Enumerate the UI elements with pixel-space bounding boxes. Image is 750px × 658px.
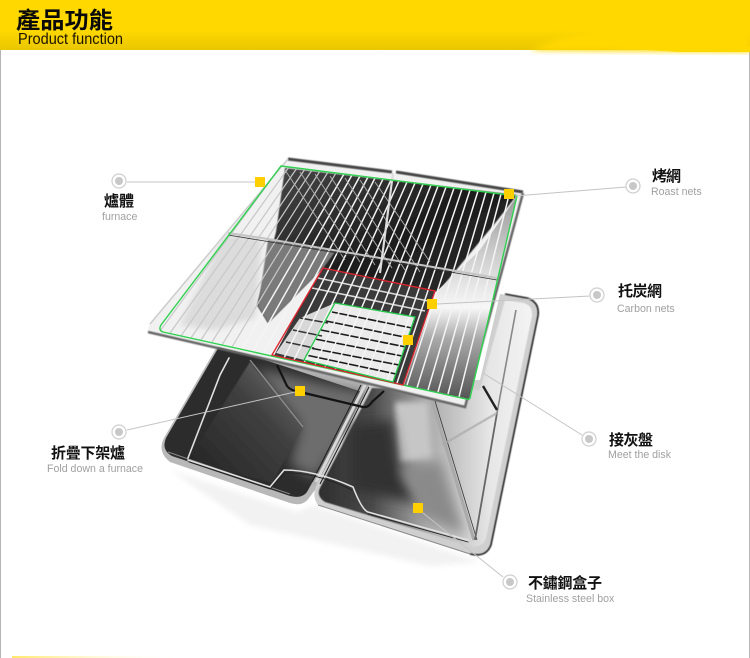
right tray bbox=[314, 294, 538, 555]
folding legs bbox=[250, 310, 516, 540]
callout: roast nets: 烤網 bbox=[652, 167, 681, 185]
marker: inner net bbox=[403, 335, 413, 345]
callout: ash tray: 接灰盤 bbox=[609, 431, 653, 449]
callout: furnace: furnace bbox=[102, 211, 137, 223]
callout: ash tray bbox=[582, 431, 672, 461]
title: 產品功能 bbox=[16, 7, 113, 33]
left tray bbox=[162, 345, 372, 504]
bottom yellow streak bbox=[12, 656, 182, 658]
tray inner wire bbox=[188, 358, 468, 542]
callout: carbon nets: Carbon nets bbox=[617, 303, 675, 315]
callout: ash tray: Meet the disk bbox=[608, 449, 672, 461]
grill wires bbox=[242, 174, 509, 397]
callout: stainless steel box: Stainless steel box bbox=[526, 593, 615, 605]
grill centre bar bbox=[380, 173, 393, 273]
callout: furnace: 爐體 bbox=[104, 192, 134, 210]
basket floor bbox=[272, 268, 435, 385]
grill cross bar bbox=[228, 233, 497, 278]
callout: roast nets bbox=[626, 167, 702, 198]
tray joint bbox=[316, 385, 365, 482]
callout: fold down furnace bbox=[47, 425, 143, 475]
marker: fold down bbox=[295, 386, 305, 396]
tray soft shadow bbox=[170, 470, 480, 566]
callout: fold down furnace: 折疊下架爐 bbox=[51, 444, 125, 462]
marker: steel box bbox=[413, 503, 423, 513]
roast net outline: green bbox=[160, 166, 517, 399]
inner net outline: green bbox=[304, 303, 415, 382]
callout: roast nets: Roast nets bbox=[651, 186, 702, 198]
diagonal back wires bbox=[285, 170, 430, 272]
subtitle: Product function bbox=[18, 31, 123, 48]
leader lines bbox=[127, 182, 626, 577]
callout: carbon nets bbox=[590, 282, 675, 315]
callout: fold down furnace: Fold down a furnace bbox=[47, 463, 143, 475]
product illustration: stainless grill bbox=[148, 159, 538, 566]
marker: carbon nets bbox=[427, 299, 437, 309]
left panel shading bbox=[180, 235, 262, 330]
grill frame bbox=[148, 159, 523, 407]
carbon net outline: red bbox=[272, 268, 435, 385]
basket cross wires bbox=[306, 312, 412, 374]
marker: furnace bbox=[255, 177, 265, 187]
dark inner panel bbox=[257, 168, 517, 323]
callout: stainless steel box: 不鏽鋼盒子 bbox=[528, 574, 602, 592]
header banner bbox=[0, 0, 750, 52]
marker: roast nets bbox=[504, 189, 514, 199]
right silver panel bbox=[404, 196, 517, 399]
callout: carbon nets: 托炭網 bbox=[618, 282, 662, 300]
callout: furnace bbox=[102, 174, 137, 223]
callout: stainless steel box bbox=[503, 574, 615, 605]
